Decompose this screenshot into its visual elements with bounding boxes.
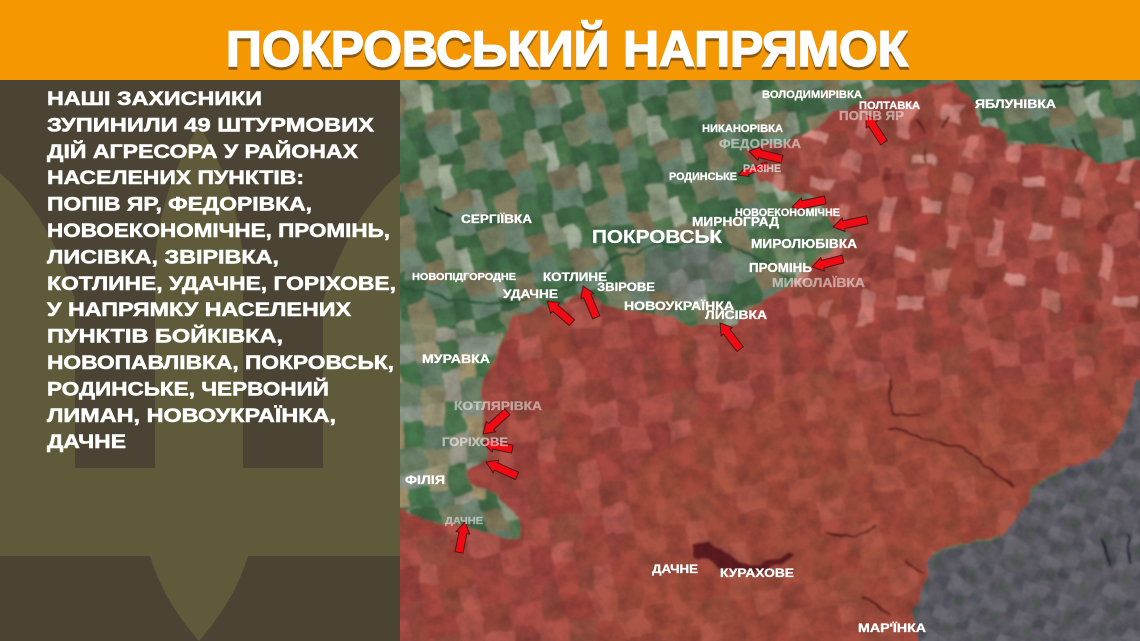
settlement labels: ПОПІВ ЯР — [839, 108, 904, 123]
settlement labels: ЯБЛУНІВКА — [975, 97, 1056, 111]
settlement labels: НОВОПІДГОРОДНЕ — [412, 271, 516, 283]
text block: assault actions summary: ЛИСІВКА, ЗВІРІВКА, — [47, 247, 279, 268]
settlement labels: РАЗІНЕ — [743, 163, 781, 175]
settlement labels: НОВОУКРАЇНКА — [624, 298, 734, 313]
text block: assault actions summary: ДАЧНЕ — [47, 432, 126, 453]
settlement labels: МАР'ЇНКА — [858, 620, 926, 635]
settlement labels: КОТЛИНЕ — [543, 270, 607, 284]
settlement labels: ЛИСІВКА — [705, 308, 767, 322]
map panel — [390, 70, 1140, 641]
settlement labels: РОДИНСЬКЕ — [669, 171, 737, 183]
settlement labels: КОТЛЯРІВКА — [454, 399, 542, 413]
text block: assault actions summary: НОВОПАВЛІВКА, ПОКРОВСЬК, — [47, 353, 394, 374]
text block: assault actions summary: РОДИНСЬКЕ, ЧЕРВОНИЙ — [47, 378, 329, 400]
reservoir — [692, 540, 792, 572]
settlement labels — [405, 89, 1056, 635]
settlement labels: ГОРІХОВЕ — [442, 435, 508, 449]
settlement labels: КУРАХОВЕ — [720, 566, 794, 580]
text block: assault actions summary: ПУНКТІВ БОЙКІВКА, — [47, 326, 283, 348]
settlement labels: НОВОЕКОНОМІЧНЕ — [735, 207, 840, 219]
settlement labels: УДАЧНЕ — [503, 287, 558, 301]
text block: assault actions summary: ДІЙ АГРЕСОРА У РАЙОНАХ — [47, 141, 358, 163]
settlement labels: СЕРГІЇВКА — [461, 211, 532, 226]
satellite terrain and occupied zone — [390, 70, 1140, 641]
header bar — [0, 0, 1140, 80]
text block: assault actions summary: КОТЛИНЕ, УДАЧНЕ, ГОРІХОВЕ, — [47, 274, 396, 295]
text block: assault actions summary: НОВОЕКОНОМІЧНЕ, ПРОМІНЬ, — [47, 221, 390, 242]
text block: assault actions summary: ПОПІВ ЯР, ФЕДОРІВКА, — [47, 195, 312, 216]
settlement labels: ПОКРОВСЬК — [592, 227, 723, 247]
title shadow and text: ПОКРОВСЬКИЙ НАПРЯМОК — [226, 20, 908, 77]
terrain grain — [400, 80, 1140, 641]
icon: trident watermark — [0, 125, 400, 641]
left panel — [0, 80, 400, 641]
text block: assault actions summary: НАШІ ЗАХИСНИКИ — [47, 89, 262, 110]
settlement labels: МИРНОГРАД — [692, 214, 780, 229]
settlement labels: ВОЛОДИМИРІВКА — [762, 89, 862, 101]
settlement labels: ФІЛІЯ — [405, 473, 445, 487]
settlement labels: МУРАВКА — [422, 352, 490, 366]
text block: assault actions summary: У НАПРЯМКУ НАСЕЛЕНИХ — [47, 300, 351, 321]
settlement labels: ПОЛТАВКА — [859, 100, 920, 112]
settlement labels: ДАЧНЕ — [652, 562, 698, 576]
red arrows: assault directions — [452, 111, 890, 554]
settlement labels: ЗВІРОВЕ — [597, 280, 655, 294]
ravines — [828, 380, 1017, 612]
text block: assault actions summary: НАСЕЛЕНИХ ПУНКТІВ: — [47, 168, 304, 189]
settlement labels: ФЕДОРІВКА — [719, 136, 802, 151]
settlement labels: НИКАНОРІВКА — [702, 123, 783, 135]
text block: assault actions summary: ЗУПИНИЛИ 49 ШТУРМОВИХ — [47, 115, 374, 136]
title shadow and text: ПОКРОВСЬКИЙ НАПРЯМОК — [226, 23, 908, 80]
text block: assault actions summary — [47, 89, 396, 453]
settlement labels: ПРОМІНЬ — [749, 260, 812, 275]
settlement labels: ДАЧНЕ — [445, 516, 483, 527]
settlement labels: МИКОЛАЇВКА — [772, 275, 866, 290]
text block: assault actions summary: ЛИМАН, НОВОУКРАЇНКА, — [47, 406, 336, 427]
settlement labels: МИРОЛЮБІВКА — [751, 236, 858, 251]
